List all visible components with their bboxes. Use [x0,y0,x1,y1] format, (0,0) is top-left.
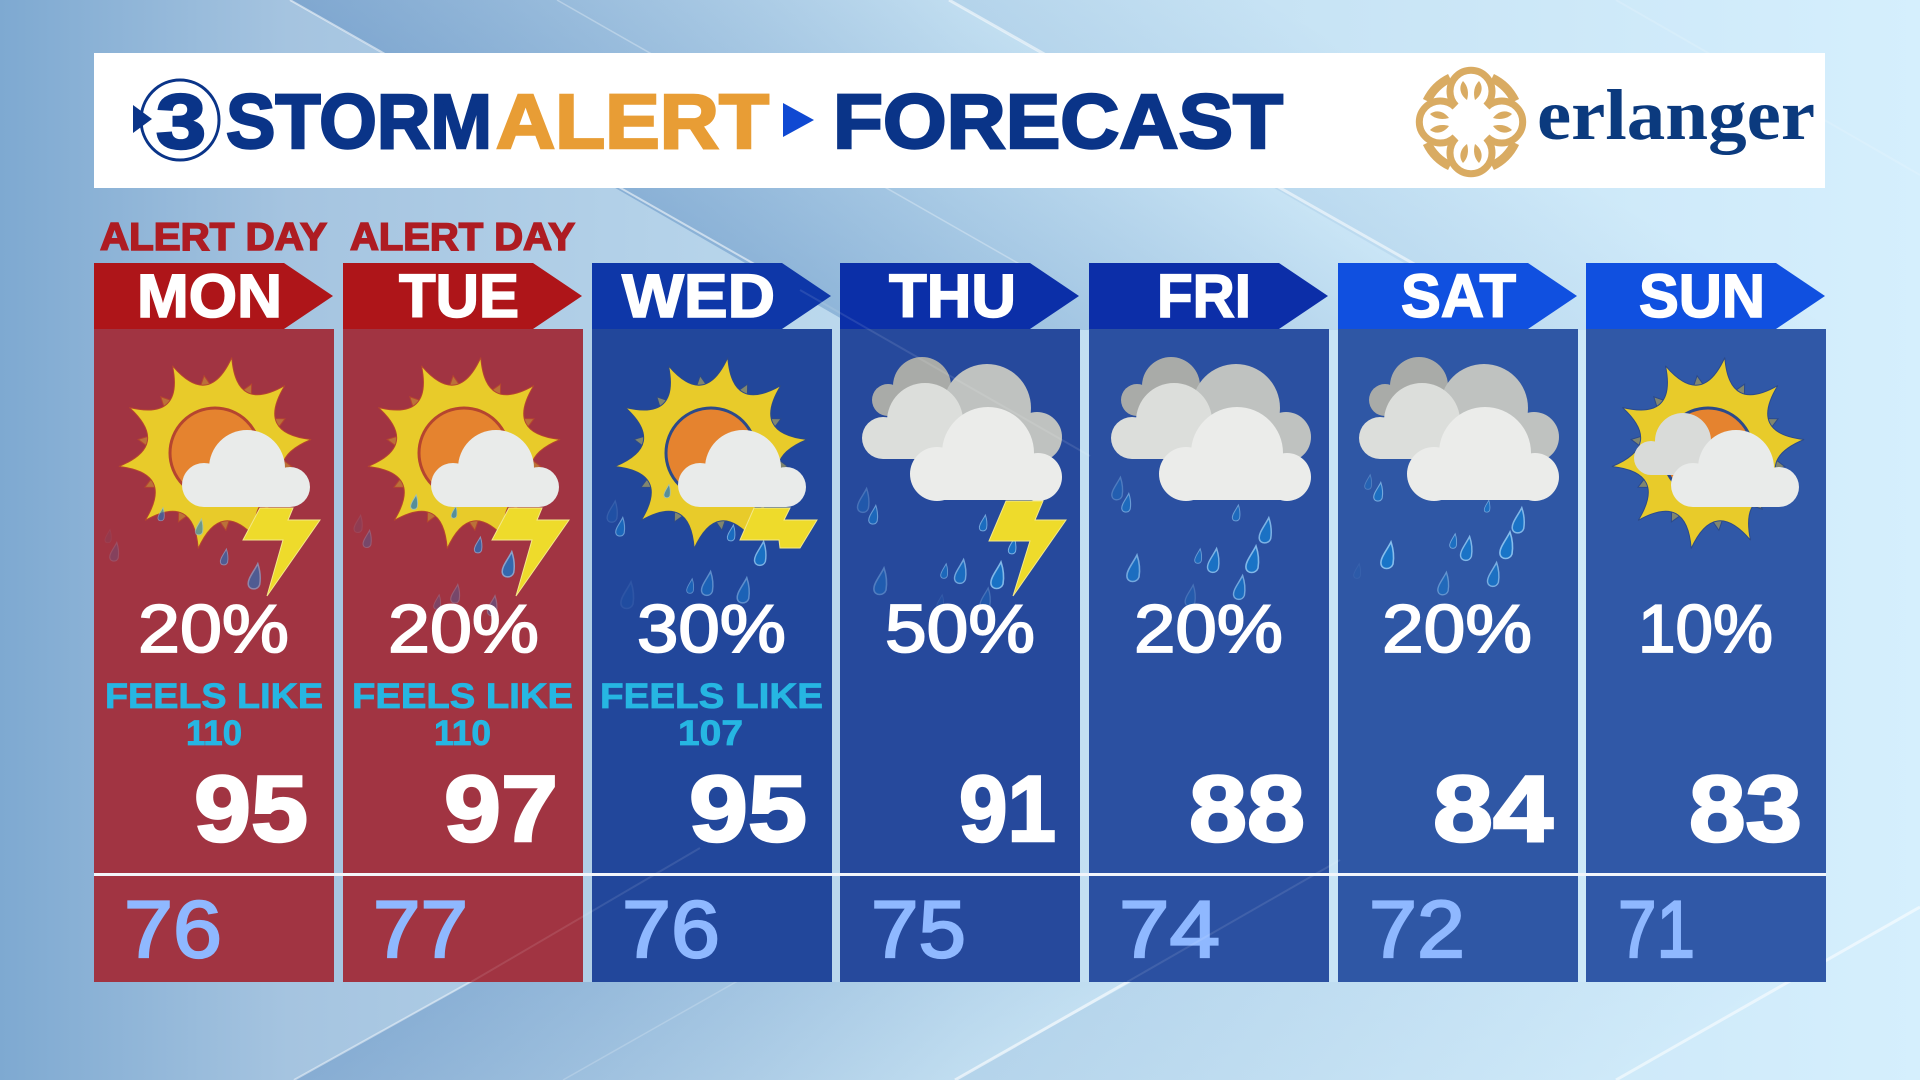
icon: sun, cloud, lightning, rain [607,358,817,608]
low temperature: 77 [373,885,468,975]
icon: sun, cloud, lightning, rain [354,358,569,616]
icon: erlanger flower logo [1419,70,1523,174]
high temperature: 91 [959,756,1056,861]
panel: Saturday [1338,262,1578,982]
station logo: circled 3: 3 [156,79,206,165]
panel: Thursday [840,262,1080,982]
day ribbon: WED [592,262,831,330]
feels like: FEELS LIKE [352,677,573,716]
high temperature: 88 [1189,756,1305,861]
day ribbon: TUE [343,262,582,330]
feels like [352,677,573,753]
alert day labels: ALERT DAY [100,216,327,259]
rain chance: 10% [1638,591,1773,667]
rain chance: 20% [1382,591,1532,667]
panel: Wednesday [592,262,832,982]
alert day labels: ALERT DAY [350,216,575,259]
day ribbon: SAT: SAT [1401,262,1516,330]
heading: Storm Alert Forecast [226,79,1283,165]
low temperature: 76 [124,885,222,975]
day ribbon: MON [94,262,333,330]
feels like: 110 [434,714,491,753]
feels like: 107 [678,714,743,753]
icon: clouds and rain [1354,357,1559,595]
day ribbon: SUN: SUN [1639,262,1765,330]
icon: sun, cloud, lightning, rain [105,358,320,596]
high temperature: 84 [1433,756,1553,861]
high temperature: 95 [194,756,308,861]
feels like: 110 [186,714,242,753]
heading: Storm Alert Forecast: ALERT [496,79,769,165]
low temperature: 71 [1618,885,1695,975]
rain chance: 20% [388,591,539,667]
low temperature: 74 [1119,885,1220,975]
day ribbon: WED: WED [622,262,775,330]
feels like: FEELS LIKE [600,677,823,716]
day ribbon: SAT [1338,262,1577,330]
sponsor wordmark: erlanger: erlanger [1537,75,1815,155]
panel: Monday [94,262,334,982]
high temperature: 95 [689,756,807,861]
low temperature: 76 [622,885,720,975]
heading: Storm Alert Forecast: FORECAST [833,79,1283,165]
rain chance: 20% [1134,591,1283,667]
icon: clouds, lightning, rain [858,357,1066,609]
heading: Storm Alert Forecast: STORM [226,79,492,165]
low temperature: 75 [871,885,966,975]
low temperature: 72 [1369,885,1465,975]
rain chance: 20% [138,591,289,667]
panel: Friday [1089,262,1329,982]
panel: Sunday [1586,262,1826,982]
rain chance: 30% [637,591,786,667]
alert day labels [100,216,575,259]
high temperature: 97 [444,756,558,861]
feels like [600,677,823,753]
day ribbon: FRI [1089,262,1328,330]
day ribbon: MON: MON [137,262,282,330]
high temperature: 83 [1689,756,1802,861]
day ribbon: FRI: FRI [1157,262,1251,330]
icon: clouds and rain [1111,357,1311,606]
day ribbon: THU [840,262,1079,330]
rain chance: 50% [885,591,1035,667]
station logo: circled 3 [133,79,219,165]
day ribbon: SUN [1586,262,1825,330]
header banner [94,53,1825,188]
icon: sun and clouds [1612,358,1804,548]
day ribbon: TUE: TUE [399,262,519,330]
feels like [105,677,323,753]
panel: Tuesday [343,262,583,982]
feels like: FEELS LIKE [105,677,323,716]
day ribbon: THU: THU [889,262,1016,330]
